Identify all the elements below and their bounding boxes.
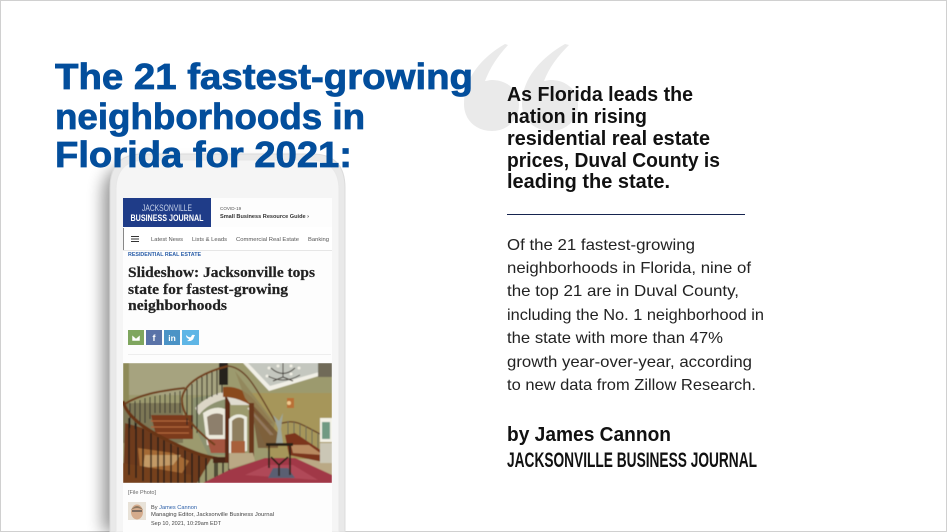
lower stairs	[123, 423, 211, 483]
body paragraph: growth year-over-year, according	[507, 354, 752, 371]
balusters back	[130, 391, 180, 429]
share buttons: f	[152, 333, 156, 343]
nav bar: Banking	[308, 237, 329, 243]
byline: By James Cannon	[151, 505, 197, 511]
title: Florida for 2021:	[55, 134, 352, 175]
table	[266, 443, 293, 446]
phone screen	[123, 198, 332, 532]
attribution	[507, 424, 757, 472]
body paragraph: the top 21 are in Duval County,	[507, 283, 739, 300]
body paragraph: to new data from Zillow Research.	[507, 377, 756, 394]
section label: RESIDENTIAL REAL ESTATE	[128, 252, 202, 258]
body paragraph: including the No. 1 neighborhood in	[507, 307, 764, 324]
share buttons: in	[168, 333, 176, 343]
masthead logo	[123, 198, 211, 227]
lead quote: residential real estate	[507, 128, 710, 150]
attribution: JACKSONVILLE BUSINESS JOURNAL	[507, 449, 757, 472]
quote mark	[464, 44, 578, 131]
hall behind	[193, 393, 225, 455]
masthead logo: BUSINESS JOURNAL	[130, 213, 204, 223]
phone mockup	[103, 154, 345, 532]
promo link: COVID-19	[220, 206, 242, 211]
article headline: Slideshow: Jacksonville tops	[128, 265, 315, 281]
column left	[225, 397, 230, 463]
author avatar	[128, 502, 146, 520]
arch	[229, 414, 247, 455]
body paragraph: Of the 21 fastest-growing	[507, 237, 695, 254]
back stair wall and stairs	[123, 403, 183, 443]
share buttons	[128, 330, 199, 345]
nav bar: Commercial Real Estate	[236, 237, 299, 243]
byline	[151, 505, 274, 527]
upper curved rail	[182, 366, 228, 445]
lead quote: leading the state.	[507, 171, 670, 193]
body paragraph: the state with more than 47%	[507, 330, 723, 347]
newel	[213, 457, 231, 463]
body paragraph	[507, 237, 764, 394]
right rail and panels	[228, 366, 328, 437]
promo link: Small Business Resource Guide ›	[220, 214, 309, 220]
front balusters	[129, 418, 215, 483]
carpet	[203, 458, 332, 483]
lead quote: prices, Duval County is	[507, 150, 720, 172]
floor	[229, 453, 332, 475]
title: neighborhoods in	[55, 96, 365, 137]
body paragraph: neighborhoods in Florida, nine of	[507, 260, 752, 277]
lead quote: nation in rising	[507, 106, 647, 128]
nav bar: Latest News	[151, 237, 183, 243]
phone shadow	[103, 165, 300, 532]
chandelier	[266, 363, 300, 381]
title	[55, 56, 473, 175]
ceiling	[242, 363, 319, 392]
walls	[123, 363, 332, 483]
byline: Managing Editor, Jacksonville Business Journal	[151, 512, 274, 518]
title: The 21 fastest-growing	[55, 56, 473, 97]
wall sconce	[287, 398, 294, 408]
nav bar	[123, 227, 332, 251]
photo caption: [File Photo]	[128, 490, 157, 496]
balusters upper	[187, 368, 222, 433]
article headline: state for fastest-growing	[128, 282, 289, 298]
promo link	[220, 206, 309, 220]
article photo: staircase	[123, 363, 332, 483]
article headline	[128, 265, 315, 314]
phone body	[110, 154, 345, 532]
article headline: neighborhoods	[128, 298, 227, 314]
masthead logo: JACKSONVILLE	[142, 203, 192, 214]
front rail	[123, 401, 229, 460]
lead quote	[507, 84, 720, 193]
attribution: by James Cannon	[507, 424, 671, 446]
back rail	[123, 388, 185, 405]
right column	[249, 403, 254, 457]
byline: Sep 10, 2021, 10:29am EDT	[151, 521, 222, 527]
bridge	[223, 387, 273, 425]
white curved steps	[195, 391, 226, 415]
vase	[273, 413, 283, 443]
nav bar: Lists & Leads	[192, 237, 227, 243]
right stairs	[284, 432, 320, 462]
window	[320, 418, 332, 442]
lead quote: As Florida leads the	[507, 84, 693, 106]
